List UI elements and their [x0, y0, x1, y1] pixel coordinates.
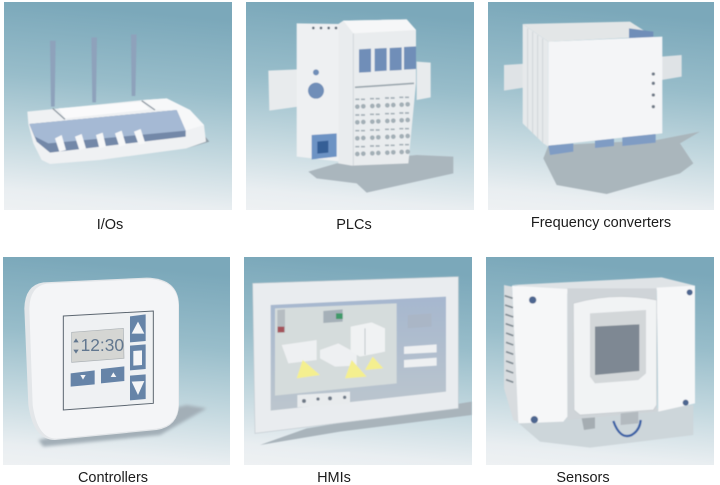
- label: Frequency converters: Frequency converters: [531, 215, 671, 231]
- icon: HMI touch panel: [253, 277, 472, 445]
- icon: frequency converter: [504, 22, 700, 194]
- panel: HMIs: [244, 257, 472, 485]
- display time: 12:30: [81, 335, 124, 355]
- label: I/Os: I/Os: [97, 217, 123, 233]
- icon: sensor housing: [504, 277, 695, 448]
- panel: PLCs: [246, 2, 474, 233]
- icon: controller: [24, 278, 207, 447]
- panel: I/Os: [4, 2, 232, 233]
- label: PLCs: PLCs: [336, 217, 372, 233]
- icon: router: [27, 34, 209, 164]
- panel: Controllers: [3, 257, 230, 485]
- icon: PLC module: [268, 19, 453, 193]
- panel: Sensors: [486, 257, 714, 485]
- panel: Frequency converters: [488, 2, 714, 231]
